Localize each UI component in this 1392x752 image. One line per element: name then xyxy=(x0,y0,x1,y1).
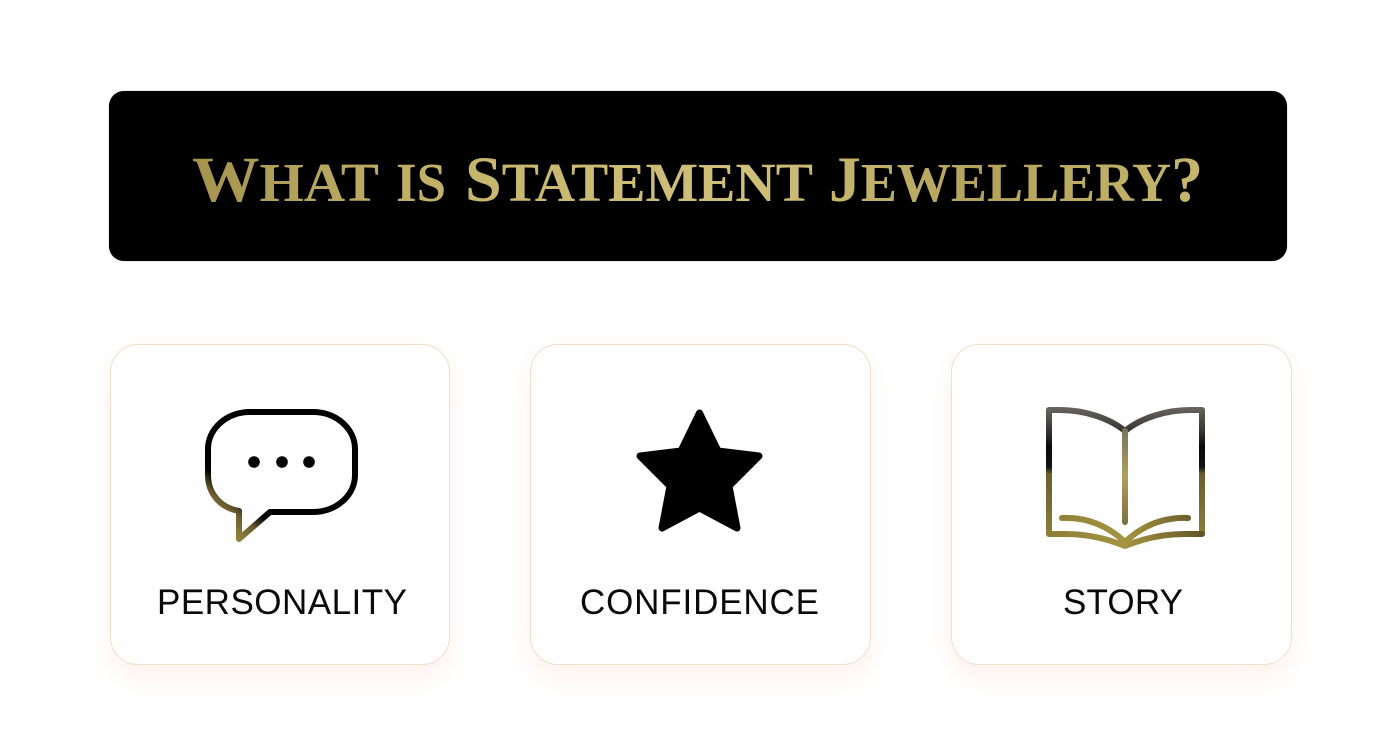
icon: open book xyxy=(1048,410,1202,546)
icon: star xyxy=(640,412,758,528)
panel: personality xyxy=(110,344,450,665)
title text: IS xyxy=(396,152,446,213)
label: story: STORY xyxy=(1062,582,1182,622)
title banner xyxy=(109,91,1287,261)
title text: STATEMENT xyxy=(465,144,813,216)
title text xyxy=(192,144,1203,216)
label: personality: PERSONALITY xyxy=(156,582,406,622)
panel: story xyxy=(951,344,1292,665)
title text: WHAT xyxy=(192,144,379,216)
label: confidence: CONFIDENCE xyxy=(580,582,818,622)
title text: JEWELLERY? xyxy=(829,144,1203,216)
icon: speech bubble xyxy=(208,412,354,538)
panel: confidence xyxy=(530,344,871,665)
